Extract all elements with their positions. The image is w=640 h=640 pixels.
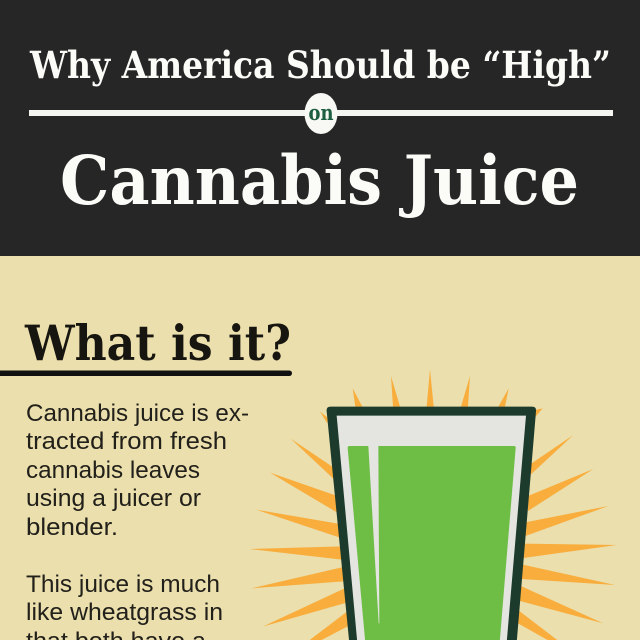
text block: description: using a juicer or <box>26 485 201 512</box>
text block: description: tracted from fresh <box>26 428 227 455</box>
sunburst rays <box>249 369 617 640</box>
text block: description: blender. <box>26 514 118 541</box>
text block: description: cannabis leaves <box>26 457 200 484</box>
title line: Cannabis Juice: Cannabis Juice <box>60 141 579 220</box>
text block: description: Cannabis juice is ex- <box>26 400 249 427</box>
green juice <box>348 446 516 640</box>
illustration: glass of green juice with sunburst <box>249 369 617 640</box>
heading: What is it?: What is it? <box>24 314 291 372</box>
panel: dark header <box>0 0 640 256</box>
glass interior <box>337 416 526 640</box>
glass <box>327 407 536 640</box>
divider with "on" badge <box>29 93 613 134</box>
text block: description: like wheatgrass in <box>26 599 223 626</box>
text block: description: This juice is much <box>26 571 220 598</box>
divider with "on" badge: on <box>308 100 334 125</box>
text block: description <box>26 400 249 640</box>
heading underline <box>0 370 292 376</box>
